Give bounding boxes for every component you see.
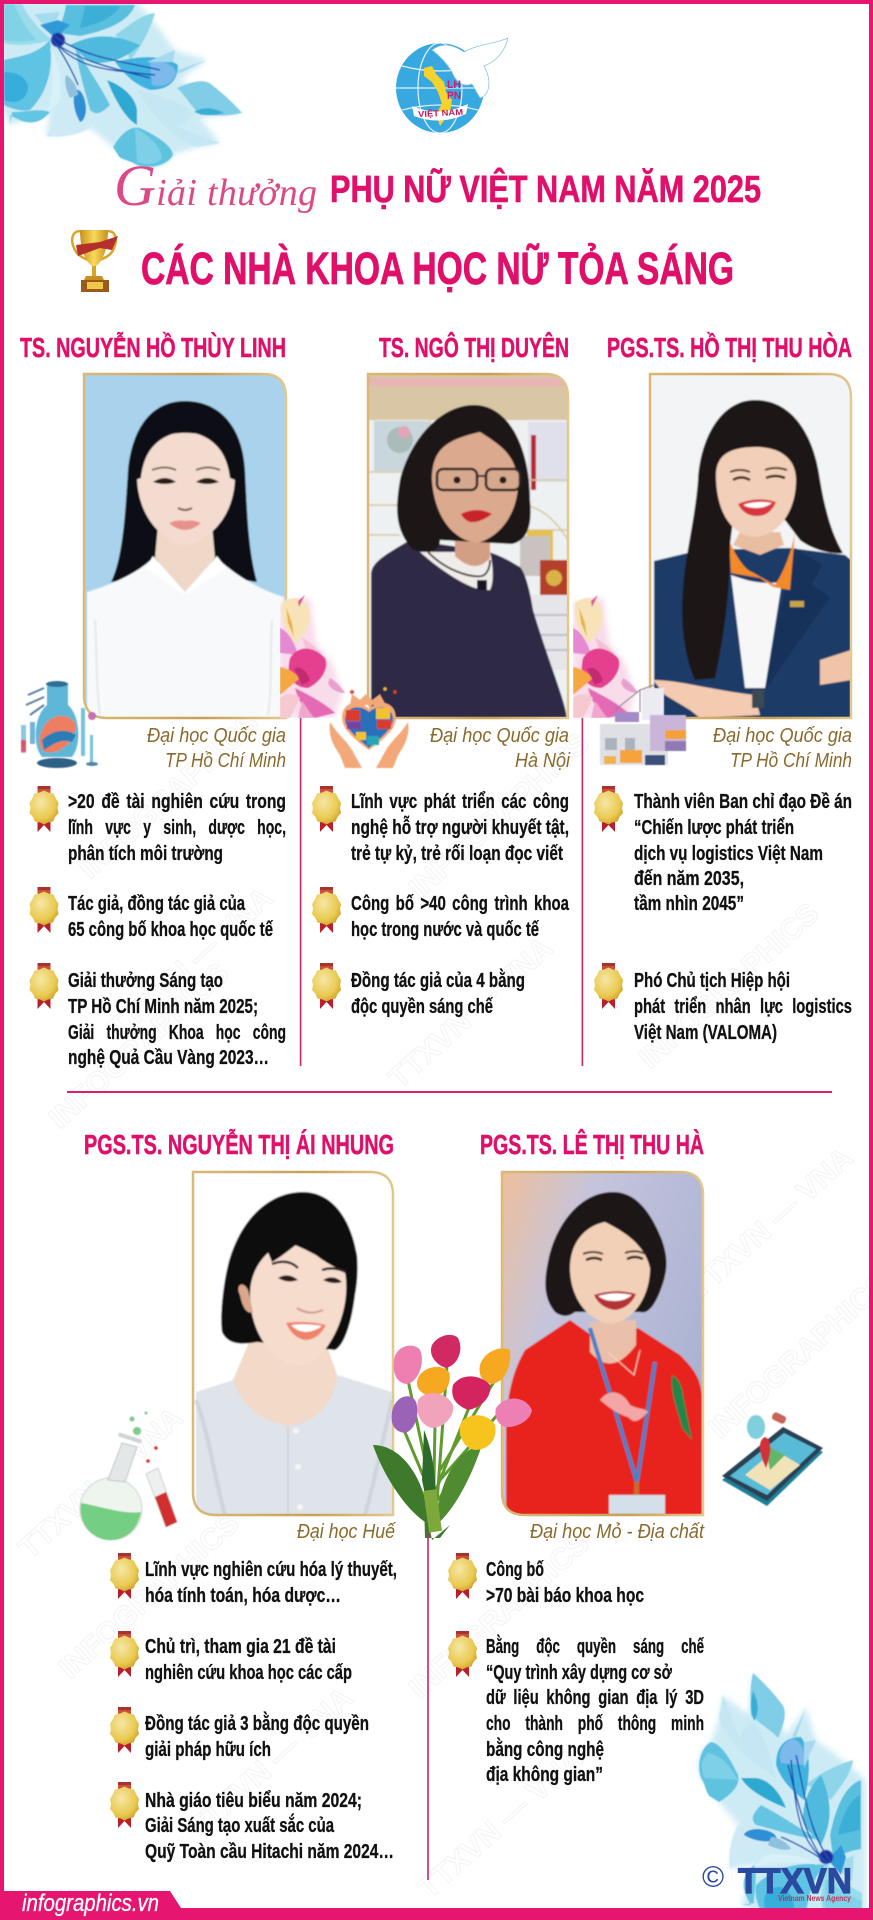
bullet 1: Công bố [486,1559,544,1581]
bullet 4 [110,1782,394,1863]
watermarks: TTXVN — VNA [103,881,280,1045]
bullet list: scientist 1 [30,786,286,1069]
watermarks: INFOGRAPHICS [403,1527,596,1705]
bullet 3: TP Hồ Chí Minh năm 2025; [68,996,258,1018]
university labels row 1: Đại học Quốc gia [430,725,569,747]
bullet 1: >20 đề tài nghiên cứu trong [68,791,286,813]
panel: scientist 1 [20,332,286,718]
decoration: pink flower 1 [280,595,345,718]
bullet 3 [312,963,525,1018]
name: TS. NGUYỄN HỒ THÙY LINH [20,332,286,363]
title line 1: PHỤ NỮ VIỆT NAM NĂM 2025 [330,167,761,211]
bullet 2: Bằng độc quyền sáng chế [486,1634,705,1658]
watermarks: INFOGRAPHICS [73,707,266,885]
university labels row 1 [147,725,852,772]
bullet 2: dữ liệu không gian địa lý 3D [486,1687,704,1709]
bullet list: scientist 5 [448,1553,705,1786]
bullet 2 [448,1631,705,1786]
photo [84,374,286,718]
bullet list: scientist 3 [594,786,852,1044]
icon: chemistry flask and DNA [21,681,98,768]
decoration: blue flower top left [0,0,242,168]
bullet 2 [312,887,570,941]
watermarks: INFOGRAPHICS [633,897,826,1075]
icon: Vietnam Women's Union logo: VIỆT NAM [418,106,463,119]
decoration: pink flower 2 [573,595,638,718]
watermarks: TTXVN — VNA [383,931,560,1095]
name: TS. NGÔ THỊ DUYÊN [379,331,569,363]
panel: scientist 3 [607,332,852,718]
bullet 3: Giải thưởng Khoa học công [68,1022,286,1044]
name: PGS.TS. LÊ THỊ THU HÀ [480,1129,704,1160]
watermarks: TTXVN — VNA [183,1681,360,1845]
bullet 2 [110,1631,352,1684]
bullet 3: Đồng tác giả 3 bằng độc quyền [145,1711,369,1735]
photo [502,1172,703,1515]
bullet 1: >70 bài báo khoa học [486,1585,644,1607]
panel: scientist 5 [480,1129,704,1515]
title line 1 [114,153,761,218]
watermarks: INFOGRAPHICS [403,727,596,905]
bullet 3: Giải thưởng Sáng tạo [68,970,223,992]
icon: trophy [72,230,118,292]
bullet 2: Phó Chủ tịch Hiệp hội [634,970,790,992]
university labels row 2: Đại học Mỏ - Địa chất [530,1521,705,1543]
photo [650,374,851,718]
decoration: blue flower bottom right [698,1673,866,1915]
watermarks: INFOGRAPHICS [53,1507,246,1685]
column dividers row 1 [301,718,582,1066]
university labels row 2 [297,1521,705,1543]
panel: scientist 4 [84,1129,394,1515]
university labels row 1: TP Hồ Chí Minh [165,750,286,772]
bullet 4: Quỹ Toàn cầu Hitachi năm 2024… [145,1841,394,1863]
bullet 2: địa không gian” [486,1764,603,1786]
bullet 2 [594,963,852,1044]
bullet 4: Giải Sáng tạo xuất sắc của [145,1813,335,1837]
bullet 1: “Chiến lược phát triển [634,817,794,839]
bullet 3 [110,1707,369,1761]
bullet 1: lĩnh vực y sinh, dược học, [68,817,286,839]
panel: scientist 2 [368,331,569,718]
university labels row 2: Đại học Huế [297,1521,397,1543]
bullet 1: hóa tính toán, hóa dược… [145,1585,341,1607]
watermarks: INFOGRAPHICS [43,957,236,1135]
watermarks: TTXVN — VNA [13,1401,190,1565]
bullet 3: nghệ Quả Cầu Vàng 2023… [68,1047,269,1069]
bullet 2: “Quy trình xây dựng cơ sở [486,1662,673,1684]
bullet 1: trẻ tự kỷ, trẻ rối loạn đọc viết [351,843,563,865]
icon: flask and test tube [80,1412,177,1540]
name: PGS.TS. NGUYỄN THỊ ÁI NHUNG [84,1129,394,1160]
bullet list: scientist 2 [312,786,570,1018]
watermarks: TTXVN — VNA [683,1141,860,1305]
bullet 1: nghệ hỗ trợ người khuyết tật, [351,815,569,839]
bullet 2 [30,887,274,941]
icon: hands holding puzzle heart [330,687,408,768]
icon: Vietnam Women's Union logo: PN [447,90,461,102]
bullet 1 [448,1553,644,1607]
university labels row 1: Đại học Quốc gia [713,725,852,747]
bullet 3: Đồng tác giả của 4 bằng [351,968,525,992]
bullet 2: Công bố >40 công trình khoa [351,893,570,915]
icon: tulip bouquet [373,1335,532,1540]
bullet 2: Tác giả, đồng tác giả của [68,893,246,915]
bullet 4: Nhà giáo tiêu biểu năm 2024; [145,1790,362,1812]
bullet 2: 65 công bố khoa học quốc tế [68,919,274,941]
bullet 2: học trong nước và quốc tế [351,919,540,941]
icon: logistics warehouse [600,685,686,765]
footer bar [0,1890,873,1920]
university labels row 1: Hà Nội [515,750,570,772]
bullet 1: Lĩnh vực phát triển các công [351,791,569,813]
footer label: infographics.vn [22,1890,159,1917]
bullet 1 [312,786,569,865]
logo: TTXVN: © [702,1861,724,1894]
column divider row 2 [427,1533,429,1880]
bullet 1: Lĩnh vực nghiên cứu hóa lý thuyết, [145,1559,397,1581]
photo [193,1172,393,1515]
bullet 2: nghiên cứu khoa học các cấp [145,1662,352,1684]
bullet 3: độc quyền sáng chế [351,996,494,1018]
title line 1: Giải thưởng [114,153,317,218]
bullet 1: tầm nhìn 2045” [634,893,744,915]
watermarks [13,707,873,1905]
watermarks: TTXVN — VNA [413,1741,590,1905]
icon: Vietnam Women's Union logo: LH [447,79,461,91]
bullet 1: phân tích môi trường [68,843,223,865]
photo [368,374,568,718]
bullet 2: Việt Nam (VALOMA) [634,1022,777,1044]
logo: TTXVN: Vietnam News Agency [778,1894,851,1903]
bullet 1 [110,1553,397,1607]
section divider [67,1091,832,1093]
bullet 3: giải pháp hữu ích [145,1739,271,1761]
university labels row 1: Đại học Quốc gia [147,725,286,747]
bullet 2: cho thành phố thông minh [486,1713,704,1735]
bullet 2: bằng công nghệ [486,1737,604,1761]
bullet 1 [594,786,852,915]
bullet 3 [30,963,286,1069]
bullet 1 [30,786,286,865]
university labels row 1: TP Hồ Chí Minh [730,750,852,772]
icon: Vietnam Women's Union logo [396,38,508,133]
bullet 2: Chủ trì, tham gia 21 đề tài [145,1636,336,1658]
logo: TTXVN: TTXVN [738,1862,852,1901]
bullet 1: đến năm 2035, [634,868,744,890]
bullet list: scientist 4 [110,1553,397,1863]
icon: phone with map [722,1411,823,1506]
